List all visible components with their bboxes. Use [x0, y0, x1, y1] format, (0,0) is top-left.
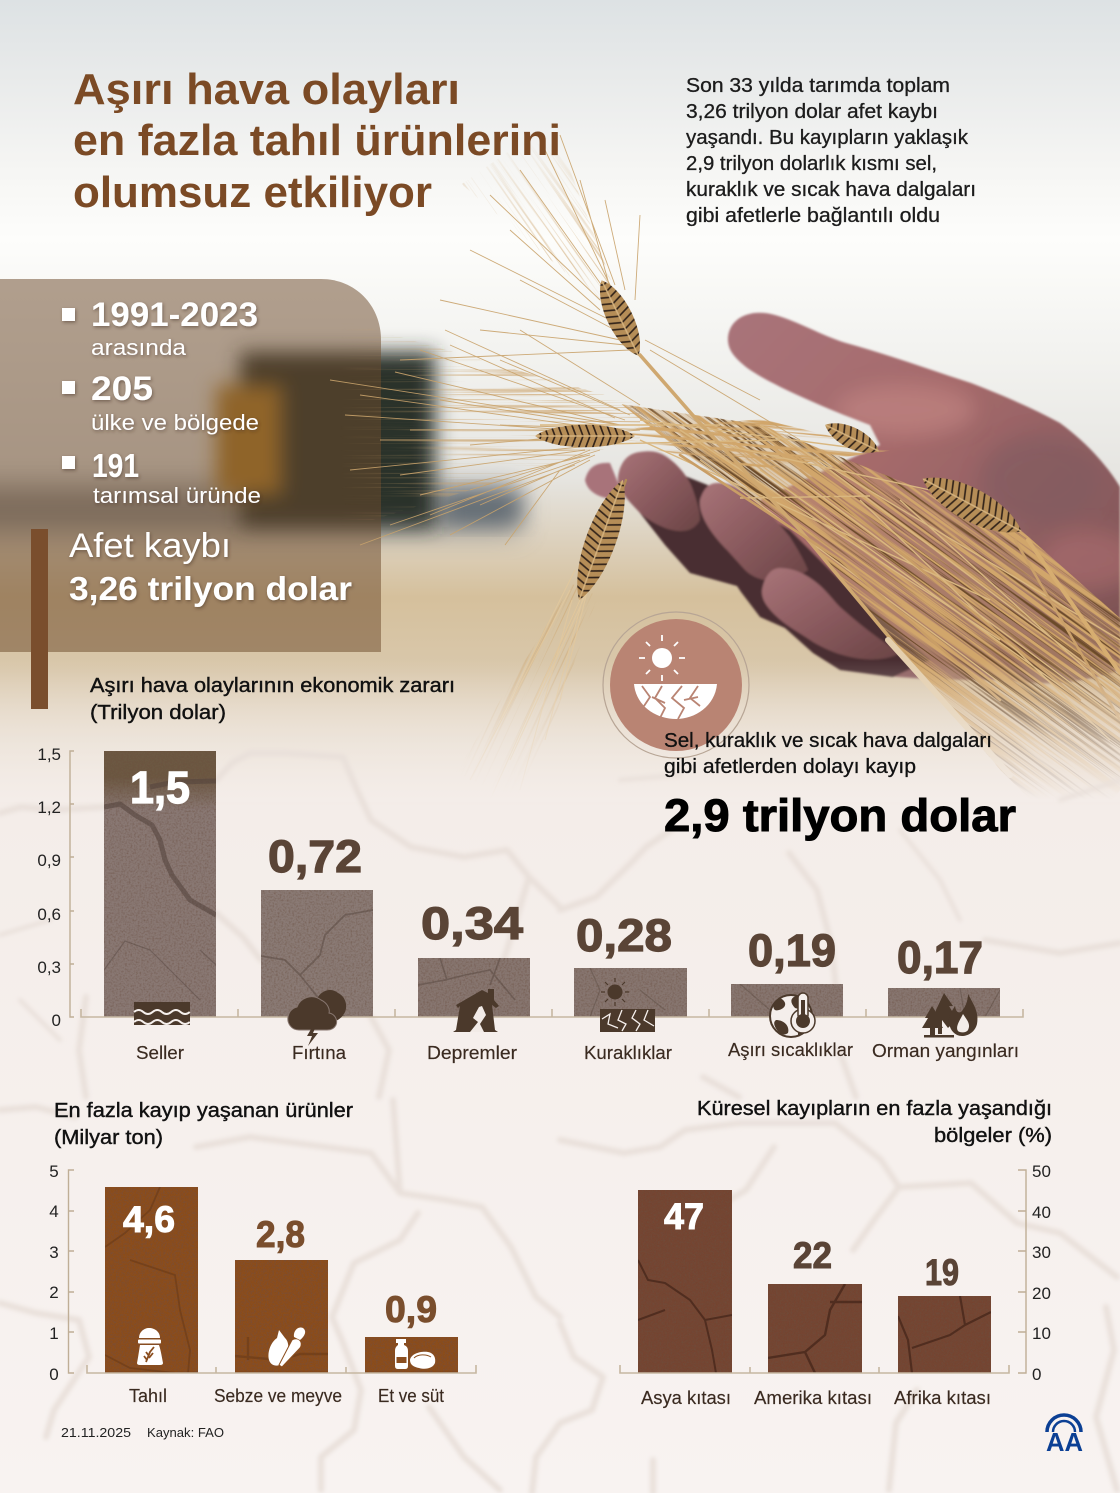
icon: globe and thermometer: [770, 993, 815, 1037]
callout: 2.9 trillion dollars: 2,9 trilyon dolar: [664, 790, 1016, 841]
summary stats list: [62, 296, 352, 607]
bar values: 0,17: [897, 932, 983, 983]
intro paragraph: kuraklık ve sıcak hava dalgaları: [686, 179, 976, 201]
heading: most affected products: En fazla kayıp yaşanan ürünler: [54, 1100, 353, 1122]
category labels: Tahıl: [129, 1386, 167, 1406]
bar values: [130, 762, 983, 983]
bar values: 0,9: [385, 1289, 437, 1330]
bar values: 2,8: [256, 1214, 305, 1255]
y axis: 1,2: [37, 798, 61, 817]
stat: total disaster loss: 3,26 trilyon dolar: [69, 570, 352, 607]
y axis: 2: [49, 1283, 59, 1302]
bar cracks: [104, 781, 1000, 1017]
y axis: 0: [1032, 1365, 1041, 1384]
bar values: 4,6: [123, 1199, 175, 1240]
category labels: Afrika kıtası: [894, 1388, 991, 1408]
dense awn textures: [362, 152, 1120, 794]
intro paragraph: 3,26 trilyon dolar afet kaybı: [686, 101, 938, 123]
y axis: 0: [52, 1011, 61, 1030]
footer: date and source: 21.11.2025: [61, 1425, 131, 1440]
bar values: 47: [664, 1196, 704, 1237]
accent bar: [31, 529, 48, 709]
icon: storm cloud: [288, 990, 346, 1046]
stat: 1991-2023: 1991-2023: [91, 296, 258, 334]
category labels: Sebze ve meyve: [214, 1386, 342, 1406]
stat: total disaster loss: [69, 527, 352, 607]
bar chart: losses by product: [49, 1162, 476, 1406]
stat: 205: ülke ve bölgede: [91, 410, 259, 435]
category labels: Asya kıtası: [641, 1388, 731, 1408]
y axis: 0,9: [37, 851, 61, 870]
heading: economic loss chart: Aşırı hava olaylarının ekonomik zararı: [90, 675, 455, 697]
intro paragraph: yaşandı. Bu kayıpların yaklaşık: [686, 127, 969, 149]
heading: most affected products: [54, 1100, 353, 1149]
y axis: 0,6: [37, 905, 61, 924]
panel: translucent summary box: [0, 279, 381, 652]
bar cracks: [105, 1187, 458, 1373]
y axis: 1: [49, 1324, 59, 1343]
bar values: [123, 1199, 437, 1330]
bar values: 1,5: [130, 762, 190, 813]
bar values: 0,34: [421, 898, 523, 949]
y axis: 30: [1032, 1243, 1051, 1262]
category labels: Et ve süt: [378, 1386, 444, 1406]
intro paragraph: [686, 75, 976, 227]
category labels: [641, 1388, 991, 1408]
heading: regions with highest loss: [697, 1098, 1052, 1147]
y axis: 5: [49, 1162, 59, 1181]
bar values: 0,28: [576, 910, 672, 961]
category labels: [136, 1040, 1019, 1063]
bar chart: losses by region: [620, 1162, 1051, 1408]
photo: hand holding barley: [0, 121, 1120, 847]
y axis: 20: [1032, 1284, 1051, 1303]
category labels: Amerika kıtası: [754, 1388, 872, 1408]
stat: total disaster loss: Afet kaybı: [69, 527, 231, 565]
bar values: 22: [793, 1235, 832, 1276]
icon: forest fire: [922, 993, 977, 1038]
callout: 2.9 trillion dollars: [664, 730, 1016, 841]
y axis: [49, 1162, 74, 1384]
bar values: 19: [925, 1252, 959, 1293]
category labels: Orman yangınları: [872, 1041, 1019, 1061]
bars: [105, 1187, 458, 1373]
title: Aşırı hava olayları: [73, 65, 460, 114]
bar values: [664, 1196, 959, 1293]
barley awns: [330, 135, 800, 545]
y axis: 50: [1032, 1162, 1051, 1181]
stat: 205: [62, 370, 259, 435]
intro paragraph: 2,9 trilyon dolarlık kısmı sel,: [686, 153, 937, 175]
stat: 191: tarımsal üründe: [93, 483, 261, 508]
icon: sun and drought: [600, 978, 655, 1032]
heading: economic loss chart: [90, 675, 455, 724]
x axis: [620, 1365, 1009, 1373]
y axis: 0,3: [37, 958, 61, 977]
intro paragraph: Son 33 yılda tarımda toplam: [686, 75, 950, 97]
title: en fazla tahıl ürünlerini: [73, 116, 561, 165]
bar values: 0,19: [748, 925, 836, 976]
stat: 1991-2023: arasında: [91, 335, 187, 360]
heading: regions with highest loss: Küresel kayıpların en fazla yaşandığı: [697, 1098, 1052, 1120]
category labels: Kuraklıklar: [584, 1043, 672, 1063]
y axis: 3: [49, 1243, 59, 1262]
stat: 205: 205: [91, 370, 153, 408]
callout: 2.9 trillion dollars: gibi afetlerden dolayı kayıp: [664, 756, 916, 778]
heading: most affected products: (Milyar ton): [54, 1127, 163, 1149]
x axis: [81, 1009, 1023, 1017]
icon: agency logo: AA: [1046, 1427, 1083, 1457]
icon: cracked house: [453, 989, 499, 1032]
y axis: 0: [49, 1365, 59, 1384]
bar values: 0,72: [268, 831, 362, 882]
y axis: 1,5: [37, 745, 61, 764]
category labels: Seller: [136, 1043, 184, 1063]
bar chart: economic loss by disaster type: [37, 745, 1023, 1063]
barley stems: [612, 355, 1120, 775]
icon: milk bottle and steak: [395, 1339, 435, 1369]
fade of photo into ground: [0, 660, 1120, 802]
footer: date and source: [61, 1425, 224, 1440]
ground cracks texture: [0, 753, 1120, 1493]
barley spikes: [535, 275, 1029, 605]
bars: [104, 751, 1000, 1017]
finger shadows: [640, 470, 930, 677]
y axis: 40: [1032, 1203, 1051, 1222]
hand: [585, 313, 1120, 683]
stat: 1991-2023: [62, 296, 258, 360]
icon: sun over cracked earth: [603, 612, 749, 758]
bars: [638, 1190, 991, 1373]
y axis: [37, 745, 74, 1030]
stat: 191: [62, 447, 261, 508]
y axis: 10: [1032, 1324, 1051, 1343]
y axis: 4: [49, 1202, 59, 1221]
y axis: [1018, 1162, 1051, 1384]
icon: flood waves: [134, 1002, 190, 1025]
title: olumsuz etkiliyor: [73, 168, 432, 217]
stat: 191: 191: [92, 447, 139, 484]
bar cracks: [638, 1260, 991, 1373]
footer: date and source: Kaynak: FAO: [147, 1425, 224, 1440]
x axis: [87, 1365, 476, 1373]
intro paragraph: gibi afetlerle bağlantılı oldu: [686, 205, 940, 227]
icon: vegetables and fruit: [268, 1328, 305, 1367]
category labels: [129, 1386, 444, 1406]
callout: 2.9 trillion dollars: Sel, kuraklık ve sıcak hava dalgaları: [664, 730, 992, 752]
category labels: Fırtına: [292, 1043, 347, 1063]
heading: regions with highest loss: bölgeler (%): [934, 1125, 1052, 1147]
heading: economic loss chart: (Trilyon dolar): [90, 702, 226, 724]
category labels: Depremler: [427, 1043, 517, 1063]
icon: grain sack: [137, 1328, 163, 1365]
category labels: Aşırı sıcaklıklar: [728, 1040, 853, 1060]
title: [73, 65, 561, 217]
